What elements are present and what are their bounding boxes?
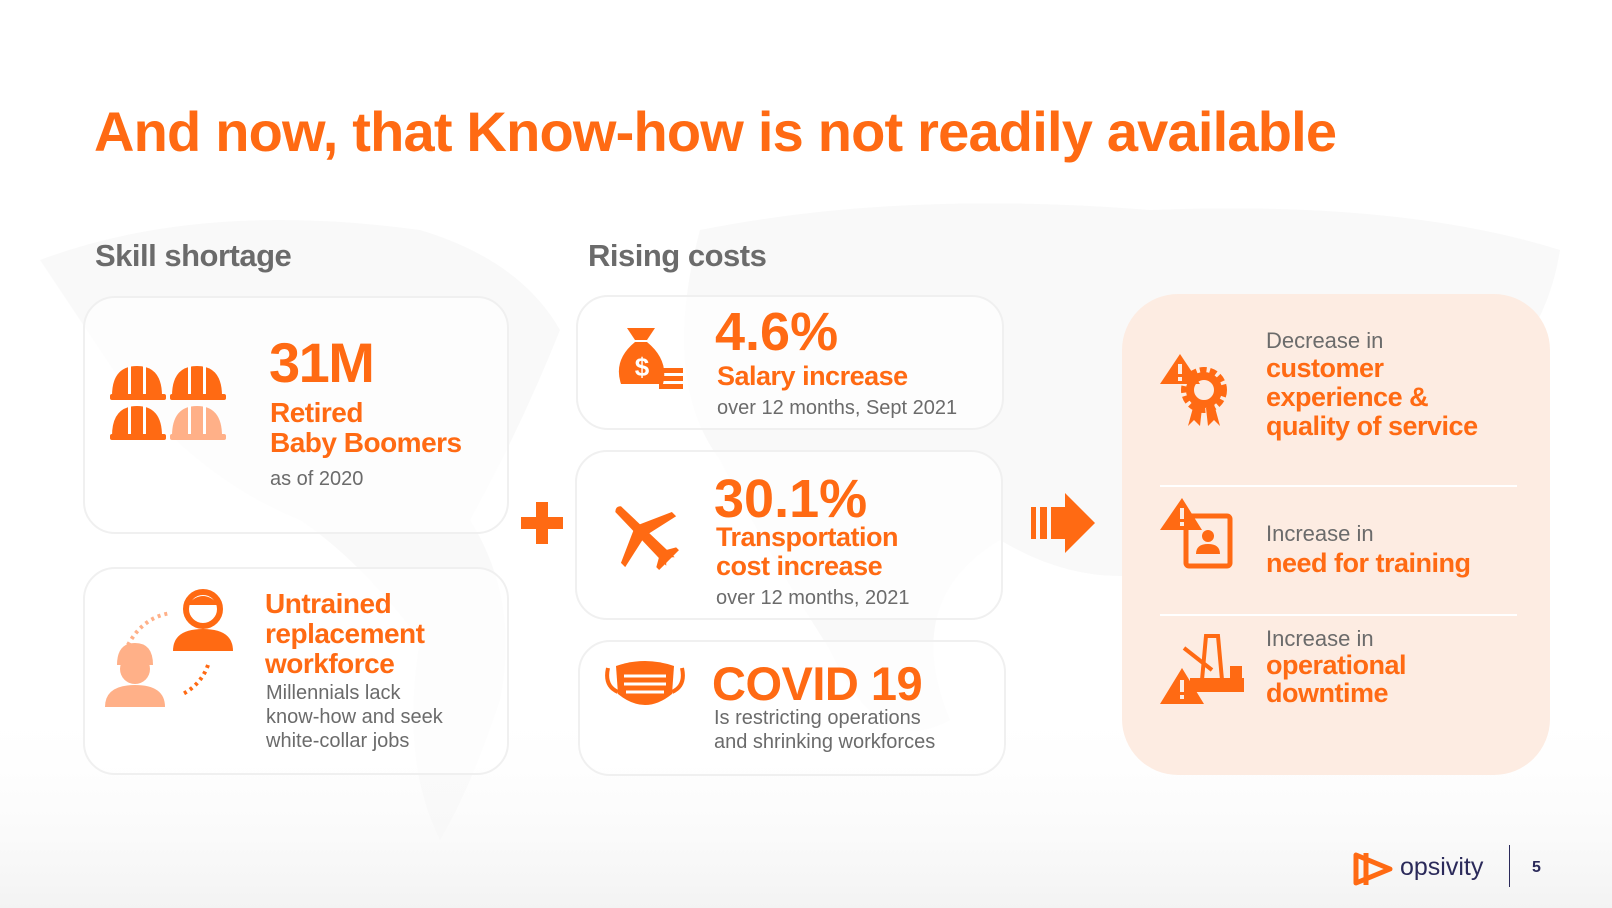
arrow <box>1031 493 1095 553</box>
item: need for training <box>1160 498 1471 578</box>
note: over 12 months, Sept 2021 <box>717 397 957 419</box>
logo: opsivity: opsivity <box>1400 853 1483 881</box>
panel: covid <box>578 640 1006 776</box>
note: over 12 months, 2021 <box>716 587 909 609</box>
icon: mask <box>605 661 685 705</box>
panel: retired baby boomers <box>83 296 509 534</box>
heading: rising costs: Rising costs <box>588 238 766 273</box>
label: transportation cost increase: cost increase <box>716 551 882 581</box>
heading: untrained replacement workforce: replacement <box>265 618 424 649</box>
panel: consequences <box>1122 294 1550 775</box>
icon: plane <box>615 506 679 570</box>
label: retired baby boomers <box>270 397 462 458</box>
icon: warning rig <box>1160 634 1244 704</box>
text: restricting <box>714 707 935 753</box>
logo: opsivity <box>1354 852 1484 886</box>
text: millennials: Millennials lack <box>266 682 400 704</box>
stat: covid 19: COVID 19 <box>712 657 922 710</box>
item: operational downtime: Increase in <box>1266 626 1374 651</box>
item: customer experience <box>1160 328 1478 441</box>
heading: untrained replacement workforce: Untrained <box>265 588 391 619</box>
label: retired baby boomers: Retired <box>270 397 363 428</box>
item: customer experience: experience & <box>1266 382 1428 412</box>
title: And now, that Know-how is not readily available <box>94 100 1336 163</box>
label: salary increase: Salary increase <box>717 361 908 391</box>
text: restricting: Is restricting operations <box>714 707 921 729</box>
heading: untrained replacement workforce: workforce <box>265 648 394 679</box>
label: retired baby boomers: Baby Boomers <box>270 427 462 458</box>
stat: 30.1%: 30.1% <box>714 469 867 529</box>
label: transportation cost increase: Transportation <box>716 522 898 552</box>
text: Decrease in <box>1266 328 1383 353</box>
text: restricting: and shrinking workforces <box>714 731 935 753</box>
item: operational downtime: downtime <box>1266 678 1388 708</box>
stat: 31M: 31M <box>269 331 373 394</box>
heading: untrained replacement workforce <box>264 588 425 679</box>
icon: workers swap <box>105 589 233 707</box>
icon: money bag <box>618 328 683 389</box>
item: customer experience: customer <box>1266 353 1384 383</box>
panel: transportation <box>575 450 1003 620</box>
page number: 5 <box>1532 859 1541 876</box>
item: need for training: need for training <box>1266 548 1471 578</box>
heading: skill shortage: Skill shortage <box>95 238 291 273</box>
item: customer experience: quality of service <box>1266 411 1478 441</box>
text: millennials: know-how and seek <box>266 706 443 728</box>
panel: untrained workforce <box>83 567 509 775</box>
text: millennials: white-collar jobs <box>266 730 409 752</box>
icon: hardhats <box>110 366 226 440</box>
icon: plus <box>521 502 563 544</box>
stat: 4.6%: 4.6% <box>715 302 838 362</box>
icon: warning gear <box>1160 354 1227 426</box>
text: millennials <box>266 682 443 752</box>
icon: warning tablet <box>1160 498 1232 568</box>
icon: money bag: $ <box>635 352 650 382</box>
note: as of 2020 <box>270 468 363 490</box>
item: operational downtime <box>1160 626 1406 708</box>
label: transportation cost increase <box>716 522 898 581</box>
item: need for training: Increase in <box>1266 521 1374 546</box>
item: operational downtime: operational <box>1266 650 1406 680</box>
panel: salary increase <box>576 295 1004 430</box>
